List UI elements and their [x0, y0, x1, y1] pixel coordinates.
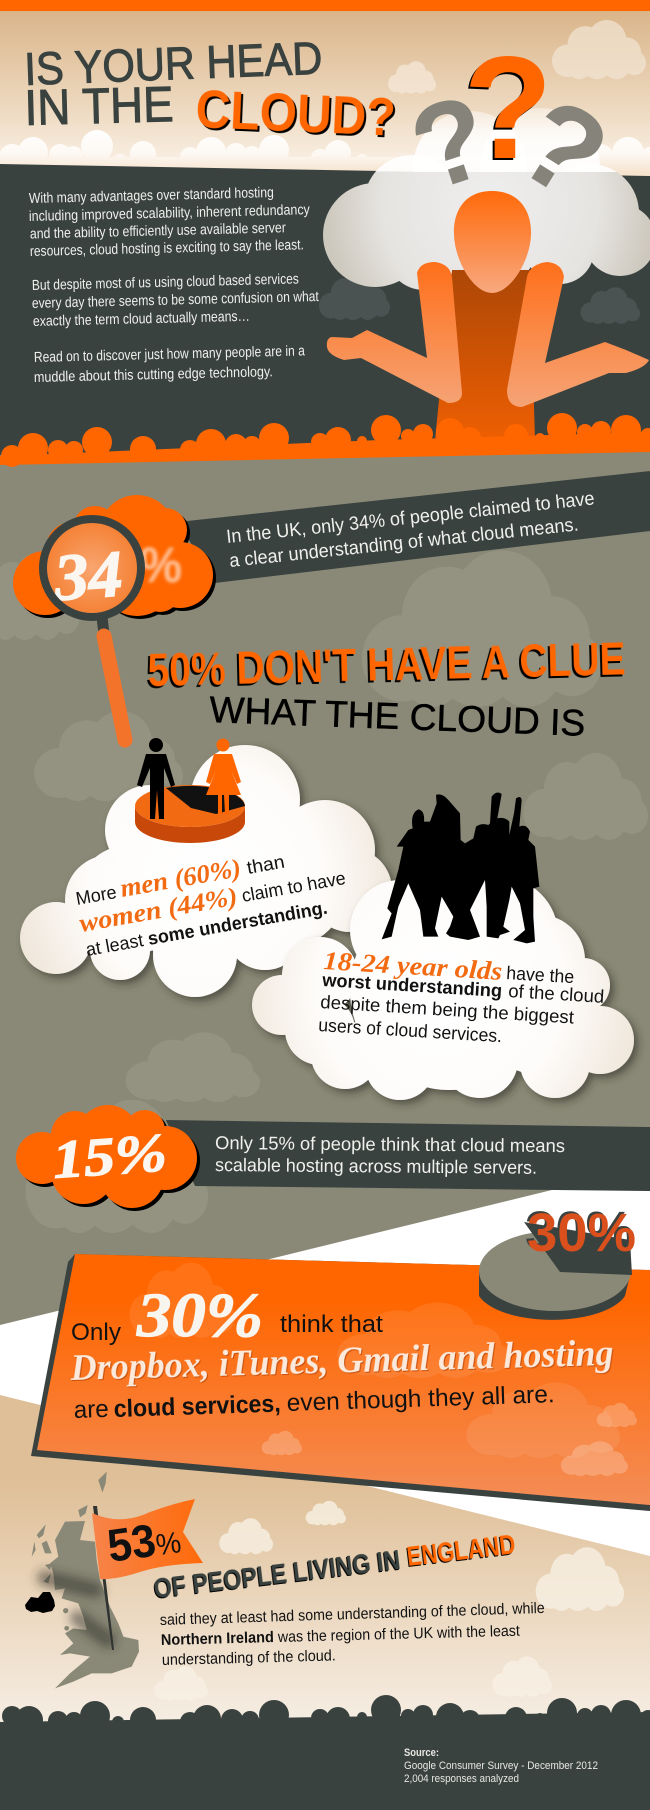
- panel text: 30%: [136, 1282, 263, 1350]
- text: England body: understanding of the cloud.: [162, 1647, 336, 1669]
- intro text block: Read on to discover just how many people are in a: [34, 343, 306, 366]
- panel: grey section background: [0, 445, 650, 1325]
- text: age group: [318, 946, 605, 1046]
- cloud: small sky: [388, 61, 436, 94]
- intro text block: including improved scalability, inherent redundancy: [29, 202, 311, 225]
- text: men and women: More: [74, 881, 118, 909]
- sky clouds: [154, 1501, 624, 1701]
- text: age group: have the: [506, 962, 575, 987]
- panel text: think that: [280, 1311, 383, 1338]
- right arm: [507, 262, 649, 407]
- pie base: [135, 806, 245, 843]
- dark banner: [178, 471, 650, 583]
- intro text block: exactly the term cloud actually means…: [33, 309, 250, 330]
- intro text block: muddle about this cutting edge technology.: [34, 364, 273, 386]
- text: men and women: than: [245, 851, 286, 878]
- panel text: Only: [71, 1319, 122, 1346]
- flag pole shadow: [45, 1578, 108, 1640]
- pie chart: 30 percent: [479, 1203, 636, 1320]
- panel: header sky: [0, 11, 650, 181]
- intro text block: resources, cloud hosting is exciting to say the least.: [30, 237, 304, 260]
- lens ring: [43, 519, 141, 617]
- intro text block: With many advantages over standard hosting: [29, 185, 274, 207]
- orange cloud strip bottom of intro: [0, 413, 650, 467]
- title: IN THE: [24, 76, 174, 136]
- question marks: [396, 26, 631, 226]
- icon: flag: [92, 1499, 203, 1650]
- text: England body: was the region of the UK with the least: [277, 1623, 521, 1646]
- panel clouds: [129, 1263, 620, 1458]
- icon: grey question mark right: ?: [496, 71, 631, 226]
- map: United Kingdom: [25, 1472, 139, 1688]
- heading: England: ENGLAND: [405, 1528, 517, 1572]
- dark banner: [166, 1120, 650, 1191]
- panel text: cloud services,: [113, 1390, 281, 1423]
- cloud row: white horizon: [0, 130, 650, 177]
- heading: 50 percent: WHAT THE CLOUD IS: [209, 689, 586, 744]
- intro text block: every day there seems to be some confusion on what: [32, 289, 319, 312]
- heading: 50 percent: [147, 632, 626, 744]
- icon: grey question mark left: ?: [396, 69, 505, 217]
- handle: [102, 617, 104, 634]
- title: CLOUD?: [194, 79, 397, 148]
- banner text: Only 15% of people think that cloud means: [215, 1132, 565, 1156]
- text: England body: said they at least had some understanding of the cloud, while: [160, 1600, 545, 1629]
- panel shadow: [31, 1254, 650, 1511]
- icon: man: [137, 738, 175, 819]
- title: IS YOUR HEAD: [23, 32, 323, 95]
- text: age group: users of cloud services.: [318, 1014, 503, 1046]
- source text: Source:: [404, 1747, 439, 1759]
- source text: Google Consumer Survey - December 2012: [404, 1760, 598, 1772]
- text: men and women: some understanding.: [146, 897, 329, 949]
- intro text block: But despite most of us using cloud based services: [32, 271, 299, 294]
- white cloud: [252, 877, 634, 1100]
- banner text: [215, 1132, 565, 1178]
- icon: orange question mark: ?: [463, 26, 553, 189]
- map: Northern Ireland: [25, 1592, 55, 1613]
- panel: 18-24 cloud: [252, 792, 634, 1100]
- white cloud: [20, 745, 392, 997]
- panel: footer: [0, 1695, 650, 1810]
- thought cloud: [323, 108, 650, 295]
- heading: England: OF PEOPLE LIVING IN: [152, 1544, 402, 1604]
- text: men and women: at least: [84, 929, 145, 960]
- illustration: person with head in cloud: [323, 108, 650, 440]
- torso: [435, 270, 535, 440]
- pole: [93, 1506, 114, 1650]
- banner text: In the UK, only 34% of people claimed to have: [225, 488, 595, 548]
- top orange bar: [0, 0, 650, 11]
- small dark clouds beside person: [319, 274, 640, 324]
- blurred percent sign: %: [140, 537, 182, 593]
- text: men and women: claim to have: [240, 867, 347, 906]
- text: men and women: men (60%): [118, 853, 243, 903]
- panel text: [69, 1282, 614, 1424]
- head: [454, 191, 531, 293]
- text: England body: Northern Ireland: [161, 1629, 274, 1649]
- callout: 34 percent: [13, 471, 650, 740]
- number in lens: 34: [51, 537, 125, 615]
- pie label: 30%: [527, 1203, 636, 1263]
- panel text: are: [73, 1396, 109, 1424]
- callout: 15 percent: [16, 1105, 650, 1208]
- left arm: [327, 262, 462, 403]
- orange cloud: [16, 1105, 197, 1208]
- panel: men vs women cloud: [20, 738, 392, 997]
- panel: lower beige background: [0, 1395, 650, 1730]
- number: 15%: [51, 1122, 169, 1190]
- icon: woman: [206, 738, 241, 814]
- flag number: 53%: [104, 1510, 184, 1572]
- panel text: even though they all are.: [286, 1381, 555, 1417]
- text: age group: 18-24 year olds: [323, 946, 503, 986]
- title: [23, 32, 397, 148]
- text: age group: worst understanding: [321, 969, 503, 1001]
- banner text: scalable hosting across multiple servers.: [215, 1154, 537, 1178]
- banner text: a clear understanding of what cloud means.: [228, 514, 580, 572]
- panel: 30 percent orange: [31, 1203, 650, 1511]
- panel body: [37, 1254, 650, 1505]
- panel text: Dropbox, iTunes, Gmail and hosting: [69, 1333, 614, 1389]
- orange cloud: [13, 495, 213, 616]
- pie chart with figures: [135, 738, 245, 843]
- text: England body: [160, 1600, 545, 1669]
- flag cloth: [92, 1499, 203, 1579]
- text: age group: despite them being the biggest: [320, 991, 575, 1027]
- intro text block: and the ability to efficiently use available server: [30, 220, 286, 242]
- intro text block: [29, 185, 319, 386]
- cloud: top right: [552, 20, 646, 79]
- source text: 2,004 responses analyzed: [404, 1773, 519, 1785]
- icon: magnifying glass: [42, 518, 182, 740]
- panel: dark intro band: [0, 164, 650, 480]
- text: men and women: [74, 851, 347, 960]
- decorative clouds on grey: [0, 550, 648, 1233]
- icon: group silhouette: [382, 792, 539, 943]
- panel: England section: [25, 1472, 624, 1701]
- footer cloud strip: [0, 1695, 650, 1810]
- text: age group: of the cloud: [508, 980, 605, 1007]
- text: men and women: women (44%): [77, 882, 240, 938]
- source text: [404, 1747, 598, 1785]
- lens: [42, 518, 142, 618]
